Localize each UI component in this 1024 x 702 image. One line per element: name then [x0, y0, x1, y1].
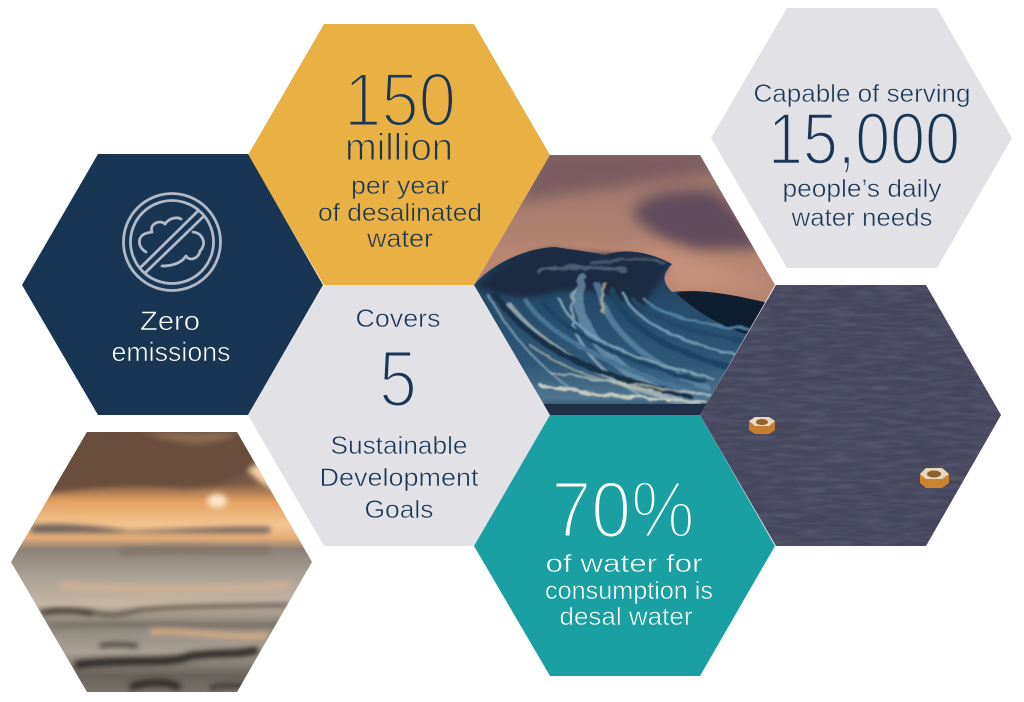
description: people’s daily: [782, 175, 942, 203]
label: Zero: [140, 306, 200, 336]
description: water needs: [790, 204, 932, 232]
hexagon: 150 million per year: [248, 24, 550, 285]
buoy: left: [749, 417, 775, 434]
description: Development: [320, 464, 479, 492]
description: water: [366, 225, 433, 253]
description: [782, 175, 942, 232]
wave streaks: [488, 259, 755, 405]
description: per year: [351, 172, 449, 200]
stat: 15,000: 15,000: [768, 99, 960, 180]
stat unit: million: million: [345, 127, 453, 169]
description: Sustainable: [330, 432, 468, 460]
description: [320, 432, 479, 524]
description: [318, 172, 482, 253]
hexagon: 70%: [474, 415, 775, 676]
photo: breaking wave at dusk: [470, 150, 780, 420]
stat: 150: 150: [344, 58, 456, 143]
icon: no clouds: [124, 194, 220, 290]
description: consumption is: [545, 577, 713, 605]
label: emissions: [112, 337, 230, 367]
hexagon: zero emissions: [22, 154, 323, 415]
buoy: right: [920, 468, 949, 488]
description: of water for: [546, 550, 702, 578]
photo: floating desalination buoys on dark sea: [700, 285, 1002, 547]
stat: 5: 5: [379, 334, 417, 423]
stat: 70%: 70%: [552, 465, 694, 554]
hexagon: capable of serving 15,000: [711, 8, 1012, 268]
label: Capable of serving: [754, 80, 970, 108]
description: of desalinated: [318, 199, 482, 227]
hexagon: covers 5 SDGs: [248, 285, 550, 546]
description: desal water: [560, 603, 692, 631]
description: [545, 550, 713, 631]
photo: blurred sunset over water: [10, 430, 314, 694]
label: [112, 306, 230, 367]
label: covers: Covers: [356, 305, 440, 333]
description: Goals: [364, 496, 434, 524]
